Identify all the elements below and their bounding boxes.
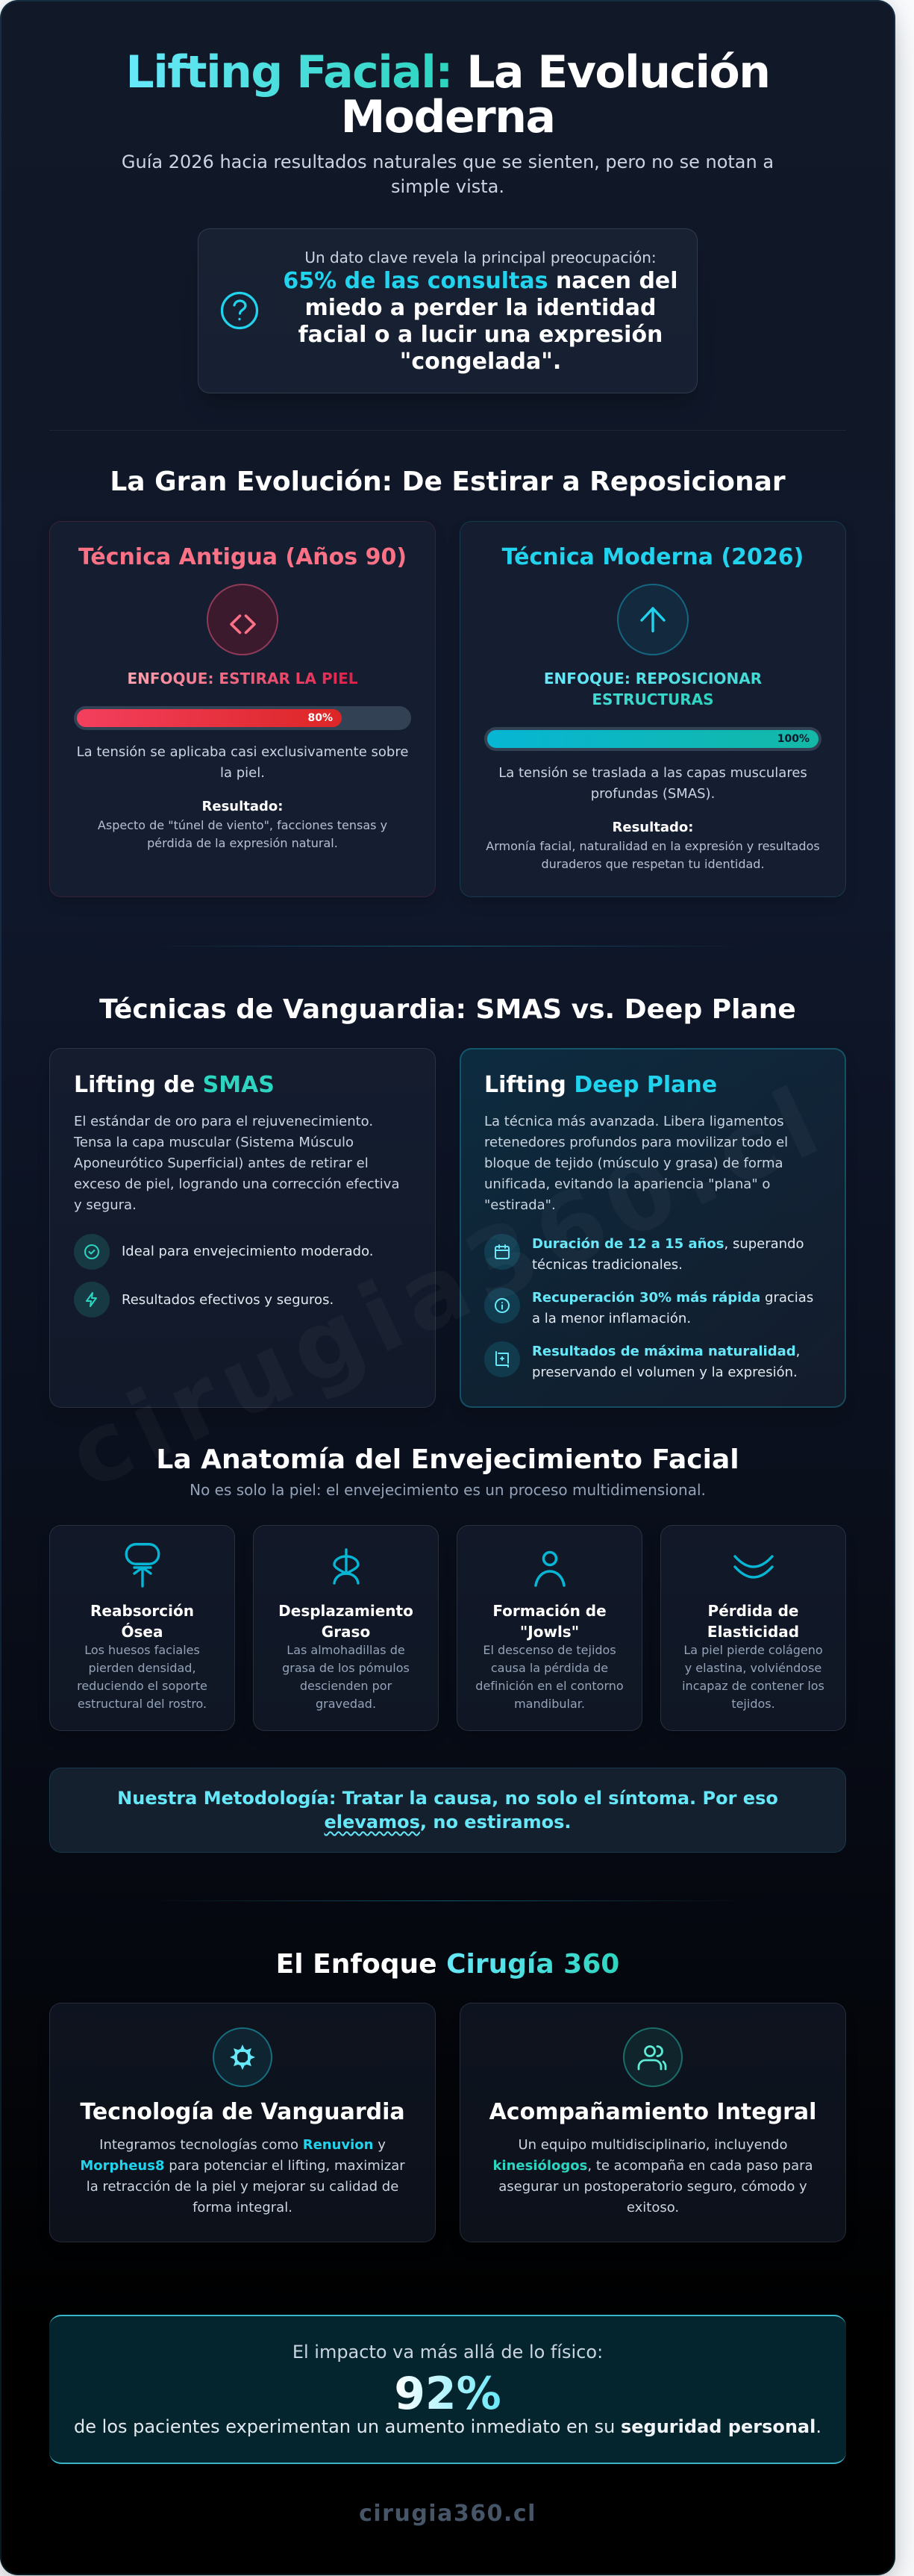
description: La técnica más avanzada. Libera ligamentos [484,1114,784,1129]
panel: tecnología [49,2003,436,2242]
panel: técnica antigua [49,521,436,897]
card text: pierden densidad, [88,1661,196,1675]
description [73,1114,399,1213]
icon: users [623,2027,683,2087]
subtitle: simple vista. [391,176,504,197]
list item [532,1344,800,1380]
methodology text: elevamos, no estiramos. [324,1812,572,1833]
focus label [544,670,762,708]
card title: Acompañamiento Integral [489,2099,816,2125]
watermark: cirugia360.cl [52,1063,843,1512]
list item: Duración de 12 a 15 años, superando [532,1236,804,1252]
card text: mandibular. [514,1697,585,1711]
panel: lifting deep plane [460,1048,846,1408]
card text: asegurar un postoperatorio seguro, cómodo y [498,2179,807,2195]
title: Moderna [341,91,554,143]
subtitle [122,152,774,197]
list item: preservando el volumen y la expresión. [532,1365,798,1380]
icon: info [484,1288,520,1323]
panel: desplazamiento graso [253,1525,439,1731]
card text: Los huesos faciales [84,1643,200,1657]
description: y segura. [74,1197,137,1213]
fact statement: facial o a lucir una expresión [298,322,663,348]
card text: reduciendo el soporte [77,1679,207,1693]
result text [486,839,820,871]
result text: duraderos que respetan tu identidad. [541,857,765,871]
card text: tejidos. [731,1697,775,1711]
description: La tensión se traslada a las capas musculares [498,765,807,781]
card text: grasa de los pómulos [282,1661,410,1675]
result text: pérdida de la expresión natural. [147,836,338,850]
card text: causa la pérdida de [491,1661,608,1675]
result label: Resultado: [613,820,693,835]
progress bar 80% [74,706,411,730]
card text: exitoso. [627,2200,679,2215]
subheading: anatomía: No es solo la piel: el envejecimiento es un proceso multidimensional. [190,1481,706,1499]
focus label: ESTRUCTURAS [592,690,714,708]
title: Lifting Facial: La Evolución [125,46,770,99]
card title: Reabsorción [90,1602,194,1620]
stat: 92%: 92% [394,2368,501,2420]
panel: elasticidad [660,1525,846,1731]
card text: Un equipo multidisciplinario, incluyendo [518,2137,788,2153]
methodology text: Nuestra Metodología: Tratar la causa, no solo el síntoma. Por eso [117,1788,778,1809]
methodology text [117,1788,778,1836]
fact statement: miedo a perder la identidad [304,295,657,321]
result label: Resultado: [202,799,283,814]
footer brand: cirugia360.cl [359,2501,536,2527]
icon: gear [213,2027,272,2087]
card text: y elastina, volviéndose [685,1661,821,1675]
card title: Ósea [122,1623,163,1641]
description [77,744,408,781]
icon: natural result [484,1341,520,1377]
card text: Las almohadillas de [287,1643,405,1657]
heading: técnica antigua: Técnica Antigua (Años 90) [78,544,407,570]
progress bar 100% [484,727,821,751]
panel: reabsorción ósea [49,1525,235,1731]
description: la piel. [220,765,265,781]
card title: Graso [322,1623,370,1641]
focus label: ENFOQUE: REPOSICIONAR [544,670,762,687]
callout: key fact [198,228,698,393]
card text: definición en el contorno [475,1679,624,1693]
panel: jowls [457,1525,642,1731]
heading: SMAS: Lifting de SMAS [74,1072,275,1098]
card text: descienden por [300,1679,392,1693]
title [125,46,770,143]
card text [282,1643,410,1711]
icon: bone [125,1543,160,1588]
progress bar 100%: 100% [777,733,810,745]
description: "estirada". [484,1197,556,1213]
icon: skin curves [733,1555,774,1579]
card text [77,1643,207,1711]
progress bar 80%: 80% [307,712,333,724]
heading: anatomía: La Anatomía del Envejecimiento Facial [156,1444,739,1475]
card title: Formación de [492,1602,607,1620]
description: exceso de piel, logrando una corrección efectiva [74,1176,399,1192]
icon: fat pad [333,1548,360,1585]
list item: Resultados de máxima naturalidad, [532,1344,800,1359]
description: profundas (SMAS). [591,786,715,802]
description: retenedores profundos para movilizar todo el [484,1135,788,1150]
card text: forma integral. [192,2200,292,2215]
heading: deep plane: Lifting Deep Plane [484,1072,717,1098]
card title [492,1602,607,1641]
card title: Desplazamiento [278,1602,413,1620]
card text [682,1643,824,1711]
card text: kinesiólogos, te acompaña en cada paso para [492,2158,813,2174]
result text: Armonía facial, naturalidad en la expresión y resultados [486,839,820,853]
card text: La piel pierde colágeno [683,1643,823,1657]
focus label: ENFOQUE: ESTIRAR LA PIEL [127,670,358,687]
heading: enfoque cirugía 360: El Enfoque Cirugía 360 [276,1949,619,1980]
panel: impacto 92% [49,2315,846,2464]
panel: lifting SMAS [49,1048,436,1408]
card text [492,2137,813,2215]
icon: calendar [484,1234,520,1270]
card text [80,2137,405,2215]
list item [532,1236,804,1273]
panel: técnica moderna [460,521,846,897]
card title [707,1602,799,1641]
fact statement: 65% de las consultas nacen del [283,268,678,294]
description: unificada, evitando la apariencia "plana" o [484,1176,770,1192]
card text: El descenso de tejidos [483,1643,616,1657]
panel: acompañamiento [460,2003,846,2242]
subtitle: Guía 2026 hacia resultados naturales que se sienten, pero no se notan a [122,152,774,172]
description: bloque de tejido (músculo y grasa) de forma [484,1156,783,1171]
result text [98,818,387,850]
card title: Tecnología de Vanguardia [80,2099,405,2125]
icon: figure [534,1551,566,1587]
heading: la gran evolución: La Gran Evolución: De Estirar a Reposicionar [110,467,786,497]
card text: incapaz de contener los [682,1679,824,1693]
description: El estándar de oro para el rejuvenecimiento. [74,1114,373,1129]
card title: "Jowls" [520,1623,579,1641]
list item: a la menor inflamación. [532,1311,691,1326]
card title: Pérdida de [708,1602,798,1620]
description: La tensión se aplicaba casi exclusivamente sobre [77,744,408,760]
description [498,765,807,802]
card title [90,1602,194,1641]
impact text: de los pacientes experimentan un aumento inmediato en su seguridad personal. [74,2416,821,2437]
icon: bolt [74,1282,110,1317]
callout: metodología [49,1768,846,1853]
heading: técnica moderna: Técnica Moderna (2026) [502,544,804,570]
card text: Integramos tecnologías como Renuvion y [99,2137,386,2153]
description: Aponeurótico Superficial) antes de retirar el [74,1156,369,1171]
heading: técnicas de vanguardia: Técnicas de Vanguardia: SMAS vs. Deep Plane [99,994,796,1025]
list item: Resultados efectivos y seguros. [122,1292,334,1308]
card text: la retracción de la piel y mejorar su calidad de [87,2179,398,2195]
fact statement [283,268,678,375]
card title [278,1602,413,1641]
icon: check [74,1234,110,1270]
fact intro: Un dato clave revela la principal preocupación: [304,249,657,266]
description [484,1114,788,1213]
fact statement: "congelada". [400,349,561,375]
impact intro: El impacto va más allá de lo físico: [292,2342,603,2363]
card title: Elasticidad [707,1623,799,1641]
list item: técnicas tradicionales. [532,1257,683,1273]
icon: arrow up [617,584,689,655]
description: Tensa la capa muscular (Sistema Músculo [74,1135,354,1150]
icon: question mark [221,291,258,330]
card text: Morpheus8 para potenciar el lifting, maximizar [80,2158,405,2174]
card text: gravedad. [316,1697,376,1711]
icon: compress chevrons [207,584,278,655]
list item: Ideal para envejecimiento moderado. [122,1244,373,1259]
result text: Aspecto de "túnel de viento", facciones tensas y [98,818,387,832]
card text: estructural del rostro. [78,1697,207,1711]
list item: Recuperación 30% más rápida gracias [532,1290,813,1306]
list item [532,1290,813,1326]
card text [475,1643,624,1711]
